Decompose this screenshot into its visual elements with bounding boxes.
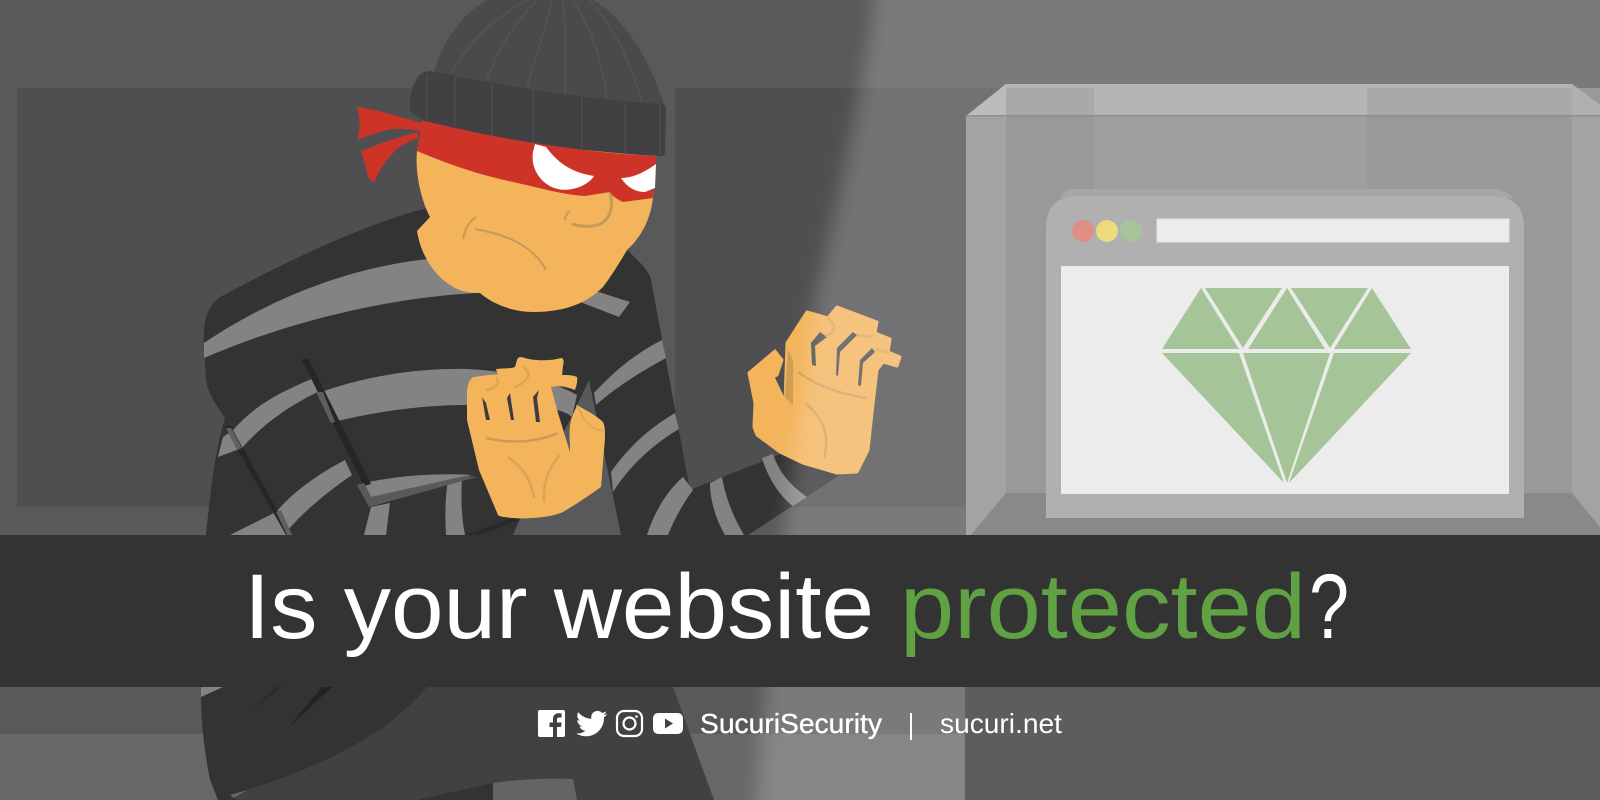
eyes — [533, 144, 656, 192]
thief character — [201, 0, 900, 800]
icon: twitter — [576, 711, 607, 736]
title: protected — [900, 556, 1306, 658]
cloak shard behind left hand — [513, 380, 621, 535]
website text: sucuri.net — [940, 708, 1062, 739]
icon: instagram — [617, 711, 642, 736]
thief near leg — [201, 687, 427, 800]
icon: youtube — [653, 713, 683, 734]
title — [244, 556, 1349, 658]
thief far leg — [230, 687, 714, 800]
bandana tails — [357, 107, 422, 183]
hat band ribs — [427, 75, 660, 155]
address bar — [1157, 219, 1509, 242]
icon: facebook — [538, 710, 565, 737]
glass display case — [966, 84, 1600, 535]
window control dots — [1072, 220, 1142, 242]
icon: diamond — [1162, 288, 1411, 483]
lower right wall — [965, 687, 1600, 800]
face lines — [463, 192, 611, 270]
browser screen — [1061, 266, 1509, 494]
case top face — [966, 84, 1600, 116]
case back wall — [1006, 88, 1600, 535]
case right wall — [1572, 116, 1600, 527]
light beam — [755, 0, 1600, 800]
title: Is your website — [244, 556, 874, 658]
left hand — [467, 357, 605, 518]
social footer — [538, 708, 1062, 740]
sweater stripes — [204, 258, 807, 535]
face — [417, 150, 656, 312]
sweater creases — [225, 358, 520, 535]
browser window — [1046, 189, 1524, 518]
bandana — [417, 120, 656, 202]
case left wall — [966, 116, 1006, 535]
head — [357, 0, 666, 312]
hat band — [410, 71, 666, 156]
hat ribs — [452, 0, 642, 102]
title: ? — [1309, 556, 1349, 658]
right hand — [749, 307, 900, 473]
handle text: SucuriSecurity — [700, 708, 882, 739]
title banner — [0, 535, 1600, 687]
case floor — [971, 493, 1600, 535]
thief body sweater — [204, 208, 843, 535]
hat dome — [434, 0, 664, 105]
divider bar — [910, 713, 912, 740]
